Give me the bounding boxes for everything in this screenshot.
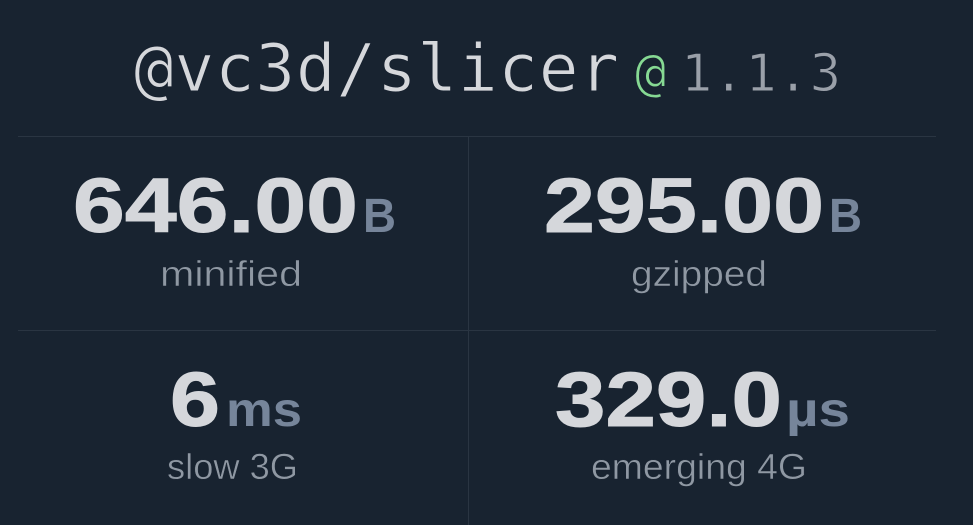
stat: gzipped size: gzipped — [631, 253, 767, 294]
stat: gzipped size: B — [829, 190, 862, 243]
stat: gzipped size — [544, 163, 862, 294]
stat: slow 3G time — [167, 357, 302, 487]
package name: @vc3d/slicer — [134, 30, 619, 107]
title — [134, 30, 841, 107]
stat: gzipped size: 295.00 — [544, 163, 824, 249]
stat: minified size — [73, 163, 396, 294]
stat: minified size: minified — [160, 253, 302, 294]
version: 1.1.3 — [681, 44, 841, 104]
stat: minified size: B — [363, 190, 396, 243]
at separator: @ — [635, 43, 666, 103]
stat: emerging 4G time: 329.0 — [555, 357, 782, 443]
stat: emerging 4G time — [555, 357, 850, 487]
stat: slow 3G time: 6 — [170, 357, 220, 443]
stat: emerging 4G time: µs — [786, 384, 850, 437]
stat: slow 3G time: slow 3G — [167, 446, 298, 487]
stat: emerging 4G time: emerging 4G — [591, 446, 807, 487]
stat: minified size: 646.00 — [73, 163, 358, 249]
stat: slow 3G time: ms — [226, 384, 302, 437]
